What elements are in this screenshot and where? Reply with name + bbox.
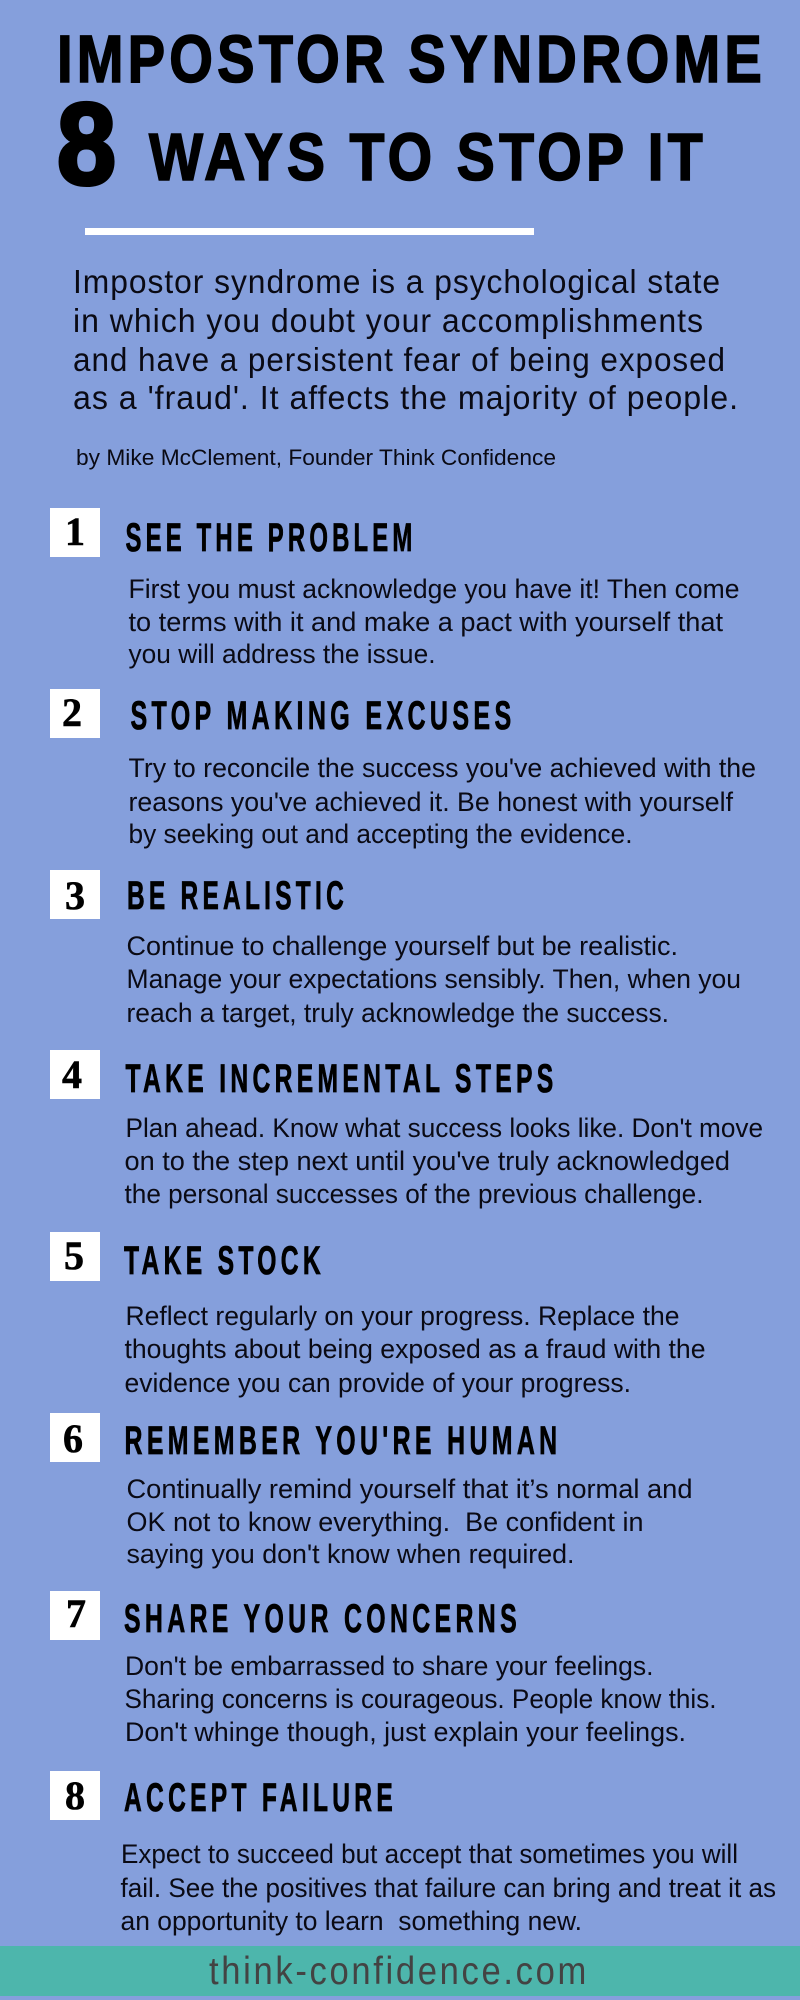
heading 5: TAKE STOCK <box>124 1239 325 1283</box>
number badge 5: 5 <box>64 1233 84 1278</box>
body 5: Reflect regularly on your progress. Replace the <box>126 1301 680 1331</box>
body 8: Expect to succeed but accept that sometimes you will <box>121 1839 738 1869</box>
footer url: think-confidence.com <box>209 1950 589 1993</box>
number badge 4 <box>50 1050 100 1099</box>
white divider bar <box>85 228 534 235</box>
body 4: the personal successes of the previous challenge. <box>124 1179 704 1209</box>
body 2: reasons you've achieved it. Be honest with yourself <box>128 787 733 817</box>
body 1 <box>128 574 740 669</box>
number badge 1: 1 <box>65 509 85 554</box>
title: 8 <box>57 79 116 209</box>
body 1: you will address the issue. <box>128 639 436 669</box>
footer band <box>0 1946 800 1996</box>
number badge 6 <box>50 1413 100 1462</box>
body 6: OK not to know everything. Be confident in <box>126 1507 644 1537</box>
body 4: on to the step next until you've truly acknowledged <box>124 1146 730 1176</box>
body 1: First you must acknowledge you have it! Then come <box>128 574 740 604</box>
body 7: Don't whinge though, just explain your feelings. <box>125 1717 686 1747</box>
number badge 2 <box>50 689 100 738</box>
body 5 <box>124 1301 706 1398</box>
body 6 <box>126 1474 692 1569</box>
number badge 3: 3 <box>65 873 85 918</box>
number badge 2: 2 <box>62 690 82 735</box>
heading 1: SEE THE PROBLEM <box>126 516 416 560</box>
body 3 <box>126 931 741 1028</box>
number badge 4: 4 <box>62 1052 82 1097</box>
body 7: Sharing concerns is courageous. People know this. <box>124 1684 716 1714</box>
title <box>57 22 766 209</box>
body 2: Try to reconcile the success you've achieved with the <box>128 753 756 783</box>
body 8 <box>120 1839 776 1936</box>
heading 8: ACCEPT FAILURE <box>124 1776 397 1820</box>
body 7: Don't be embarrassed to share your feelings. <box>125 1651 654 1681</box>
body 8: an opportunity to learn something new. <box>120 1906 582 1936</box>
body 2 <box>128 753 756 849</box>
intro paragraph: and have a persistent fear of being exposed <box>73 341 726 378</box>
step 4 <box>50 1050 763 1209</box>
body 5: evidence you can provide of your progress. <box>124 1368 631 1398</box>
body 1: to terms with it and make a pact with yourself that <box>128 607 723 637</box>
step 8 <box>50 1771 776 1936</box>
step 1 <box>50 508 740 669</box>
number badge 7 <box>50 1591 100 1640</box>
number badge 8: 8 <box>65 1773 85 1818</box>
body 3: reach a target, truly acknowledge the success. <box>126 998 669 1028</box>
number badge 7: 7 <box>66 1591 86 1636</box>
body 4 <box>124 1113 763 1209</box>
step 3 <box>50 870 741 1028</box>
body 6: saying you don't know when required. <box>126 1539 574 1569</box>
step 6 <box>50 1413 692 1569</box>
body 7 <box>124 1651 716 1747</box>
body 2: by seeking out and accepting the evidence. <box>128 819 632 849</box>
byline: by Mike McClement, Founder Think Confidence <box>76 445 556 470</box>
body 8: fail. See the positives that failure can bring and treat it as <box>120 1873 776 1903</box>
number badge 5 <box>50 1232 100 1281</box>
body 6: Continually remind yourself that it’s normal and <box>126 1474 692 1504</box>
heading 2: STOP MAKING EXCUSES <box>130 694 516 738</box>
intro paragraph: in which you doubt your accomplishments <box>73 302 704 339</box>
heading 7: SHARE YOUR CONCERNS <box>124 1597 521 1641</box>
step 7 <box>50 1591 716 1747</box>
step 2 <box>50 689 756 849</box>
step 5 <box>50 1232 706 1398</box>
body 5: thoughts about being exposed as a fraud with the <box>124 1334 706 1364</box>
intro paragraph: Impostor syndrome is a psychological state <box>73 263 721 300</box>
heading 3: BE REALISTIC <box>127 874 348 918</box>
title: WAYS TO STOP IT <box>149 120 707 195</box>
body 3: Continue to challenge yourself but be realistic. <box>126 931 678 961</box>
intro paragraph: as a 'fraud'. It affects the majority of people. <box>73 379 739 416</box>
body 4: Plan ahead. Know what success looks like. Don't move <box>126 1113 763 1143</box>
number badge 3 <box>50 870 100 919</box>
number badge 1 <box>50 508 100 557</box>
body 3: Manage your expectations sensibly. Then, when you <box>126 964 741 994</box>
number badge 8 <box>50 1771 100 1820</box>
intro paragraph <box>73 263 739 416</box>
number badge 6: 6 <box>63 1416 83 1461</box>
